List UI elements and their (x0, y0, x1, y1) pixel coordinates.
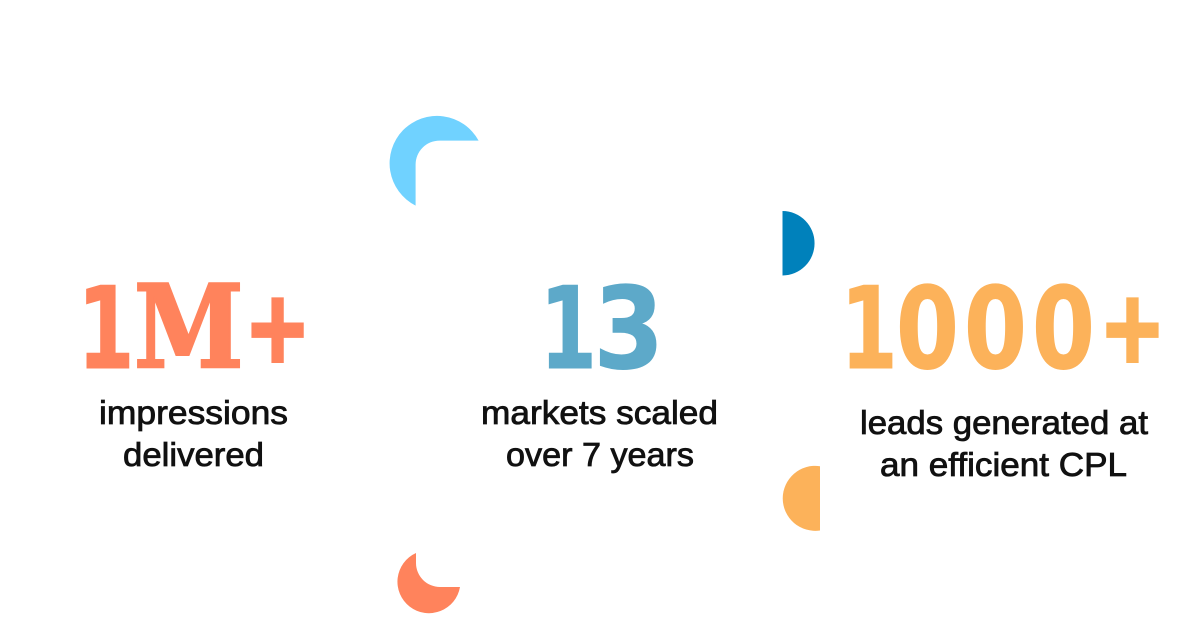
number: 13: 3 (594, 264, 664, 396)
number: 1M+: M (134, 261, 244, 395)
panel: impressions stat (77, 261, 310, 473)
label: impressions delivered: delivered (123, 436, 264, 473)
panel: leads stat (840, 264, 1165, 483)
panel: markets stat (481, 264, 718, 473)
icon: coral circle accent (397, 553, 460, 613)
label: markets scaled over 7 years (481, 394, 718, 473)
label: impressions delivered (99, 394, 288, 473)
number: 1M+: + (245, 270, 310, 384)
label: leads generated at an efficient CPL: an efficient CPL (880, 446, 1127, 483)
number: 1M+: 1 (77, 264, 134, 396)
number: 1000+: 1 (840, 264, 898, 396)
icon: light blue circle accent (390, 116, 479, 206)
label: impressions delivered: impressions (99, 394, 288, 431)
label: leads generated at an efficient CPL: leads generated at (860, 404, 1148, 441)
number: 13: 1 (540, 264, 597, 396)
label: markets scaled over 7 years: markets scaled (481, 394, 718, 431)
icon: dark blue half circle (782, 211, 815, 276)
number: 1000+: 000 (896, 264, 1095, 396)
label: markets scaled over 7 years: over 7 years (506, 436, 694, 473)
label: leads generated at an efficient CPL (860, 404, 1148, 483)
icon: yellow half circle (783, 466, 820, 531)
number: 1000+: + (1100, 270, 1165, 384)
